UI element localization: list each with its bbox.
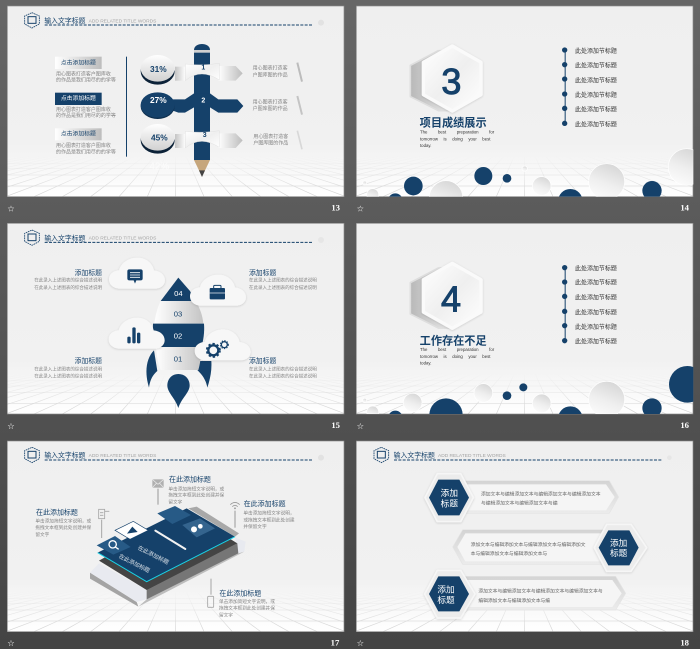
header: slide 13 title: 输入文字标题: [44, 16, 86, 25]
icon: small pencil 2: [297, 96, 302, 115]
header: slide 17 title: [25, 447, 324, 463]
decorative balls: [363, 366, 694, 414]
text block top left: 在此录入上述图表的综合描述说明: [34, 277, 102, 284]
text block: left: 在此添加标题: [36, 507, 78, 516]
left label 2: [55, 93, 116, 119]
footer: star icon: ☆: [357, 421, 364, 431]
icon: document with stem: [99, 509, 109, 538]
right caption 3: 户图库图的作品: [253, 139, 288, 146]
left label 3: 的作品是我们用尽的的学等: [56, 148, 116, 155]
header: slide 15 title: ADD RELATED TITLE WORDS: [89, 236, 156, 242]
slide 15: rocket infographic: [0, 223, 572, 431]
text block bottom left: 在此录入上述图表的综合描述说明: [34, 372, 102, 379]
subtitle: The best preparation for: [420, 130, 495, 135]
row 2: chevron bar with hexagon: 添加文本与编辑添加文本与编辑添加文本与编辑添加文: [471, 541, 586, 548]
arrow 2 navy: 2: [201, 97, 205, 104]
timeline list: 此处添加节标题: [575, 76, 617, 84]
slide 17: isometric phone infographic: [0, 441, 572, 648]
cloud: briefcase: [190, 275, 246, 306]
timeline list: [562, 264, 617, 346]
text block: top centre: 单击添加简短文字说明，或: [168, 485, 225, 492]
text block: left: 留文字: [35, 531, 50, 538]
header: slide 18 title: [374, 447, 672, 463]
right caption 2: 户图库图的作品: [253, 105, 288, 112]
rocket: 01: [174, 355, 182, 364]
left label 2: 点击添加标题: [61, 94, 96, 102]
text block: bottom: 拖拽文本框到此处创建并保: [219, 604, 275, 611]
icon: phone with stem: [208, 579, 214, 607]
isometric phone: [90, 506, 246, 607]
row 1: chevron bar with hexagon: [425, 474, 619, 522]
timeline list: 此处添加节标题: [575, 294, 617, 302]
text block: left: [35, 507, 92, 538]
subtitle: tomorrow is doing your best: [420, 354, 491, 359]
timeline list: 此处添加节标题: [575, 47, 617, 55]
footer: star icon: ☆: [7, 421, 15, 431]
text block: top centre: 在此添加标题: [169, 474, 211, 483]
text block: bottom: 留文字: [219, 611, 233, 618]
footer: star icon: ☆: [357, 638, 364, 648]
section title: 项目成绩展示: [420, 116, 487, 130]
footer: star icon: ☆: [357, 204, 364, 214]
right caption 2: 用心图表打造客: [253, 98, 288, 105]
page number 13: 13: [331, 203, 341, 213]
text block bottom right: 在此录入上述图表的综合描述说明: [249, 372, 317, 379]
timeline list: 此处添加节标题: [575, 323, 617, 331]
percent circle 45%: [141, 124, 175, 154]
rocket: [146, 278, 211, 408]
text block bottom right: 在此录入上述图表的综合描述说明: [249, 365, 317, 372]
text block: top centre: 拖拽文本框到此处创建并保: [168, 491, 225, 498]
text block bottom left: 在此录入上述图表的综合描述说明: [34, 365, 102, 372]
cloud: gears: [195, 329, 251, 360]
row 1: chevron bar with hexagon: 添加文本与编辑添加文本与编辑添加文本与编辑添加文本: [481, 490, 601, 497]
page number 15: 15: [331, 420, 341, 430]
slide 13: pencil infographic: [0, 6, 572, 214]
timeline list: 此处添加节标题: [575, 91, 617, 99]
text block: top centre: 留文字: [168, 498, 183, 505]
footer: star icon: ☆: [7, 638, 15, 648]
right caption 1: 户图库图的作品: [253, 72, 288, 79]
text block: right: 在此添加标题: [244, 499, 286, 508]
timeline list: 此处添加节标题: [575, 264, 617, 272]
timeline list: 此处添加节标题: [575, 120, 617, 128]
text block bottom left: 添加标题: [75, 356, 102, 365]
page number 16: 16: [680, 420, 690, 430]
rocket: 04: [174, 289, 183, 298]
section title: 工作存在不足: [420, 333, 487, 347]
percent circle 45%: 45%: [151, 132, 168, 142]
text block: bottom: 在此添加标题: [219, 589, 261, 598]
header: slide 13 title: [25, 13, 324, 28]
timeline list: 此处添加节标题: [575, 338, 617, 346]
text block: bottom: [219, 589, 275, 618]
right caption 1: 用心图表打造客: [253, 65, 288, 72]
timeline list: [562, 47, 617, 128]
header: slide 17 title: ADD RELATED TITLE WORDS: [89, 453, 156, 459]
rocket: 03: [174, 310, 182, 319]
left label 3: 用心图表打造客户图库收: [56, 142, 111, 149]
hexagon badge 3: [410, 46, 481, 111]
row 2: chevron bar with hexagon: 本与编辑添加文本与编辑添加文本与: [471, 550, 547, 557]
timeline list: 此处添加节标题: [575, 279, 617, 287]
left label 3: [55, 128, 116, 155]
left label 1: [55, 57, 116, 84]
left label 3: 点击添加标题: [61, 129, 96, 137]
arrow 1 with ribbon: [175, 63, 243, 81]
arrow 3 with ribbon: 3: [203, 132, 207, 139]
text block top right: 在此录入上述图表的综合描述说明: [249, 284, 317, 291]
arrow 2 navy: [167, 93, 243, 113]
hexagon badge 3: 3: [441, 61, 461, 102]
text block top right: [249, 268, 317, 291]
text block: left: 单击添加简短文字说明，或: [35, 518, 92, 525]
footer: star icon: ☆: [7, 204, 15, 214]
percent circle 31%: [141, 55, 175, 85]
left label 1: 的作品是我们用尽的的学等: [56, 77, 116, 84]
text block top left: 添加标题: [75, 268, 102, 277]
cloud: bar chart: [109, 318, 165, 349]
text block: top centre: [168, 474, 225, 505]
text block top left: 在此录入上述图表的综合描述说明: [34, 284, 102, 291]
header: slide 15 title: [25, 230, 324, 245]
icon: small pencil 1: [297, 63, 302, 82]
text block: bottom: 单击添加简短文字说明，或: [219, 598, 275, 605]
header: slide 18 title: 输入文字标题: [394, 451, 435, 460]
row 2: chevron bar with hexagon: 添加: [610, 538, 627, 548]
right caption 3: 用心图表打造客: [253, 133, 288, 140]
text block bottom right: 添加标题: [249, 356, 276, 365]
decorative balls: [363, 148, 694, 197]
row 3: chevron bar with hexagon: [425, 570, 626, 618]
subtitle: today.: [420, 360, 431, 365]
vertical divider: [125, 57, 128, 157]
cloud: chat: [109, 258, 165, 289]
percent circle 27%: [141, 92, 175, 119]
header: slide 17 title: 输入文字标题: [44, 451, 86, 460]
subtitle: tomorrow is doing your best: [420, 137, 491, 142]
text block top right: 添加标题: [249, 268, 276, 277]
row 3: chevron bar with hexagon: 添加: [437, 585, 455, 595]
text block top right: 在此录入上述图表的综合描述说明: [249, 277, 317, 284]
arrow 3 with ribbon: [175, 131, 243, 148]
header: slide 18 title: ADD RELATED TITLE WORDS: [438, 453, 506, 459]
timeline list: 此处添加节标题: [575, 308, 617, 316]
icon: wifi with stem: [230, 502, 240, 528]
isometric phone: 在此添加标题: [136, 544, 171, 566]
page number 14: 14: [680, 203, 690, 213]
percent circle 27%: 27%: [150, 95, 167, 105]
slide 14: section 3: [356, 6, 694, 212]
row 3: chevron bar with hexagon: 编辑添加文本与编辑添加文本与编: [478, 597, 550, 604]
timeline list: 此处添加节标题: [575, 61, 617, 69]
left label 1: 用心图表打造客户图库收: [56, 70, 111, 77]
faint reflection number: 42%: [149, 161, 169, 172]
row 3: chevron bar with hexagon: 标题: [437, 594, 455, 605]
left label 2: 的作品是我们用尽的的学等: [56, 112, 116, 119]
text block: right: 单击添加简短文字说明，: [243, 509, 295, 516]
timeline list: 此处添加节标题: [575, 106, 617, 114]
text block: left: 拖拽文本框到此处创建并保: [35, 524, 92, 531]
text block bottom left: [34, 356, 102, 379]
text block: right: 或拖拽文本框到此处创建: [243, 516, 295, 523]
row 1: chevron bar with hexagon: 标题: [441, 497, 458, 508]
row 3: chevron bar with hexagon: 添加文本与编辑添加文本与编辑添加文本与编辑添加文本与: [478, 588, 603, 595]
text block top left: [34, 268, 102, 291]
isometric phone: 在此添加标题: [117, 552, 152, 575]
header: slide 15 title: 输入文字标题: [44, 233, 86, 242]
left label 2: 用心图表打造客户图库收: [56, 106, 111, 113]
icon: small pencil 3: [297, 131, 302, 149]
pencil: [194, 44, 210, 177]
text block: right: 并保留文字: [243, 523, 267, 530]
left label 1: 点击添加标题: [61, 58, 96, 66]
text block bottom right: [249, 356, 317, 379]
page number 18: 18: [680, 637, 690, 647]
arrow 1 with ribbon: 1: [201, 65, 205, 72]
page number 17: 17: [331, 637, 340, 647]
hexagon badge 4: 4: [441, 278, 461, 319]
row 1: chevron bar with hexagon: 与编辑添加文本与编辑添加文本与编: [481, 499, 558, 506]
header: slide 13 title: ADD RELATED TITLE WORDS: [89, 18, 156, 24]
slide 16: section 4: [356, 223, 694, 429]
text block: right: [243, 499, 295, 530]
row 1: chevron bar with hexagon: 添加: [441, 488, 458, 498]
slide 18: hexagon list: [128, 441, 700, 648]
subtitle: The best preparation for: [420, 347, 495, 352]
icon: envelope with stem: [152, 479, 164, 505]
percent circle 31%: 31%: [150, 64, 167, 74]
rocket: 02: [174, 331, 182, 340]
row 2: chevron bar with hexagon: [453, 524, 647, 571]
hexagon badge 4: [410, 263, 481, 328]
row 2: chevron bar with hexagon: 标题: [610, 547, 628, 558]
subtitle: today.: [420, 143, 431, 148]
